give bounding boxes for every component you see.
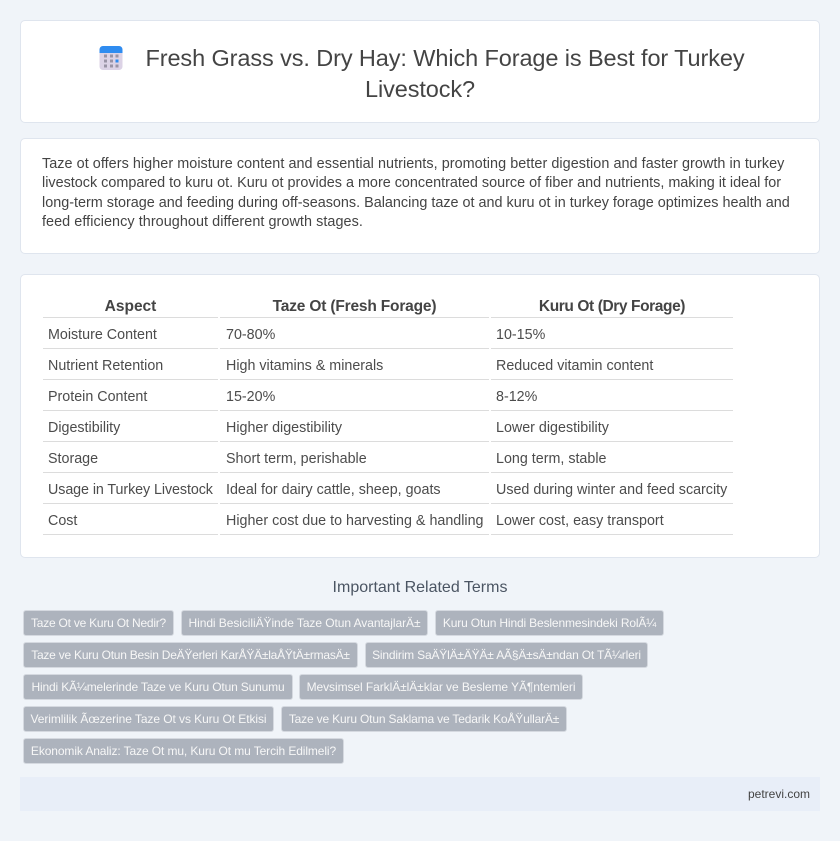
row: cost: Lower cost, easy transport	[496, 513, 664, 529]
row: storage: Storage	[48, 451, 98, 467]
title: Livestock?	[365, 76, 475, 102]
row: nutrient retention: High vitamins & minerals	[226, 358, 383, 374]
intro text: livestock compared to kuru ot. Kuru ot provides a more concentrated source of fiber and nutrients, making it ideal for	[42, 175, 781, 191]
row: storage: Short term, perishable	[226, 451, 367, 467]
related terms heading: Important Related Terms	[333, 579, 507, 596]
row: digestibility: Digestibility	[48, 420, 120, 436]
row: digestibility: Higher digestibility	[226, 420, 342, 436]
related term tags	[23, 610, 664, 764]
icon: calendar	[100, 46, 122, 70]
footer site name: petrevi.com	[748, 787, 810, 801]
intro text: long-term storage and feeding during off-seasons. Balancing taze ot and kuru ot in turkey forage optimizes health and	[42, 195, 790, 211]
related term tags: Kuru Otun Hindi Beslenmesindeki RolÃ¼	[443, 616, 656, 630]
related term tags: Ekonomik Analiz: Taze Ot mu, Kuru Ot mu Tercih Edilmeli?	[31, 744, 336, 758]
row: digestibility	[43, 420, 733, 442]
row: storage	[43, 451, 733, 473]
related term tags: Hindi BesiciliÄŸinde Taze Otun AvantajlarÄ±	[189, 616, 420, 630]
related term tags: Taze Ot ve Kuru Ot Nedir?	[31, 616, 166, 630]
row: nutrient retention: Reduced vitamin content	[496, 358, 653, 374]
table header: Aspect	[105, 298, 156, 315]
panel: header	[20, 20, 820, 123]
panel: comparison table	[20, 274, 820, 558]
related term tags: Taze ve Kuru Otun Saklama ve Tedarik KoÅŸullarÄ±	[289, 712, 559, 726]
intro text: feed efficiency throughout different growth stages.	[42, 214, 363, 230]
related term tags: Sindirim SaÄŸlÄ±ÄŸÄ± AÃ§Ä±sÄ±ndan Ot TÃ¼rleri	[372, 648, 641, 662]
row: protein content	[43, 389, 733, 411]
row: protein content: 15-20%	[226, 389, 275, 405]
related term tags: Taze ve Kuru Otun Besin DeÄŸerleri KarÅŸÄ±laÅŸtÄ±rmasÄ±	[31, 648, 350, 662]
row: cost: Cost	[48, 513, 77, 529]
row: usage in turkey livestock: Used during winter and feed scarcity	[496, 482, 727, 498]
row: digestibility: Lower digestibility	[496, 420, 609, 436]
row: protein content: 8-12%	[496, 389, 537, 405]
row: cost	[43, 513, 733, 535]
row: moisture content	[43, 327, 733, 349]
related term tags: Hindi KÃ¼melerinde Taze ve Kuru Otun Sunumu	[31, 680, 285, 694]
related term tags: Mevsimsel FarklÄ±lÄ±klar ve Besleme YÃ¶ntemleri	[307, 680, 575, 694]
intro text	[42, 156, 790, 230]
row: usage in turkey livestock: Ideal for dairy cattle, sheep, goats	[226, 482, 441, 498]
intro text: Taze ot offers higher moisture content and essential nutrients, promoting better digestion and faster growth in turkey	[42, 156, 784, 172]
row: storage: Long term, stable	[496, 451, 606, 467]
comparison table	[43, 298, 733, 535]
table header: Taze Ot (Fresh Forage)	[273, 298, 436, 315]
row: moisture content: 70-80%	[226, 327, 275, 343]
row: protein content: Protein Content	[48, 389, 147, 405]
row: moisture content: 10-15%	[496, 327, 545, 343]
panel: introduction	[20, 138, 820, 254]
title: Fresh Grass vs. Dry Hay: Which Forage is Best for Turkey	[145, 45, 745, 71]
row: usage in turkey livestock: Usage in Turkey Livestock	[48, 482, 213, 498]
row: moisture content: Moisture Content	[48, 327, 157, 343]
title	[145, 45, 745, 102]
table header: Kuru Ot (Dry Forage)	[539, 298, 685, 315]
row: nutrient retention	[43, 358, 733, 380]
table header	[43, 298, 733, 318]
row: nutrient retention: Nutrient Retention	[48, 358, 163, 374]
row: usage in turkey livestock	[43, 482, 733, 504]
related term tags: Verimlilik Ãœzerine Taze Ot vs Kuru Ot Etkisi	[30, 712, 267, 726]
footer bar	[20, 777, 820, 811]
row: cost: Higher cost due to harvesting & handling	[226, 513, 484, 529]
